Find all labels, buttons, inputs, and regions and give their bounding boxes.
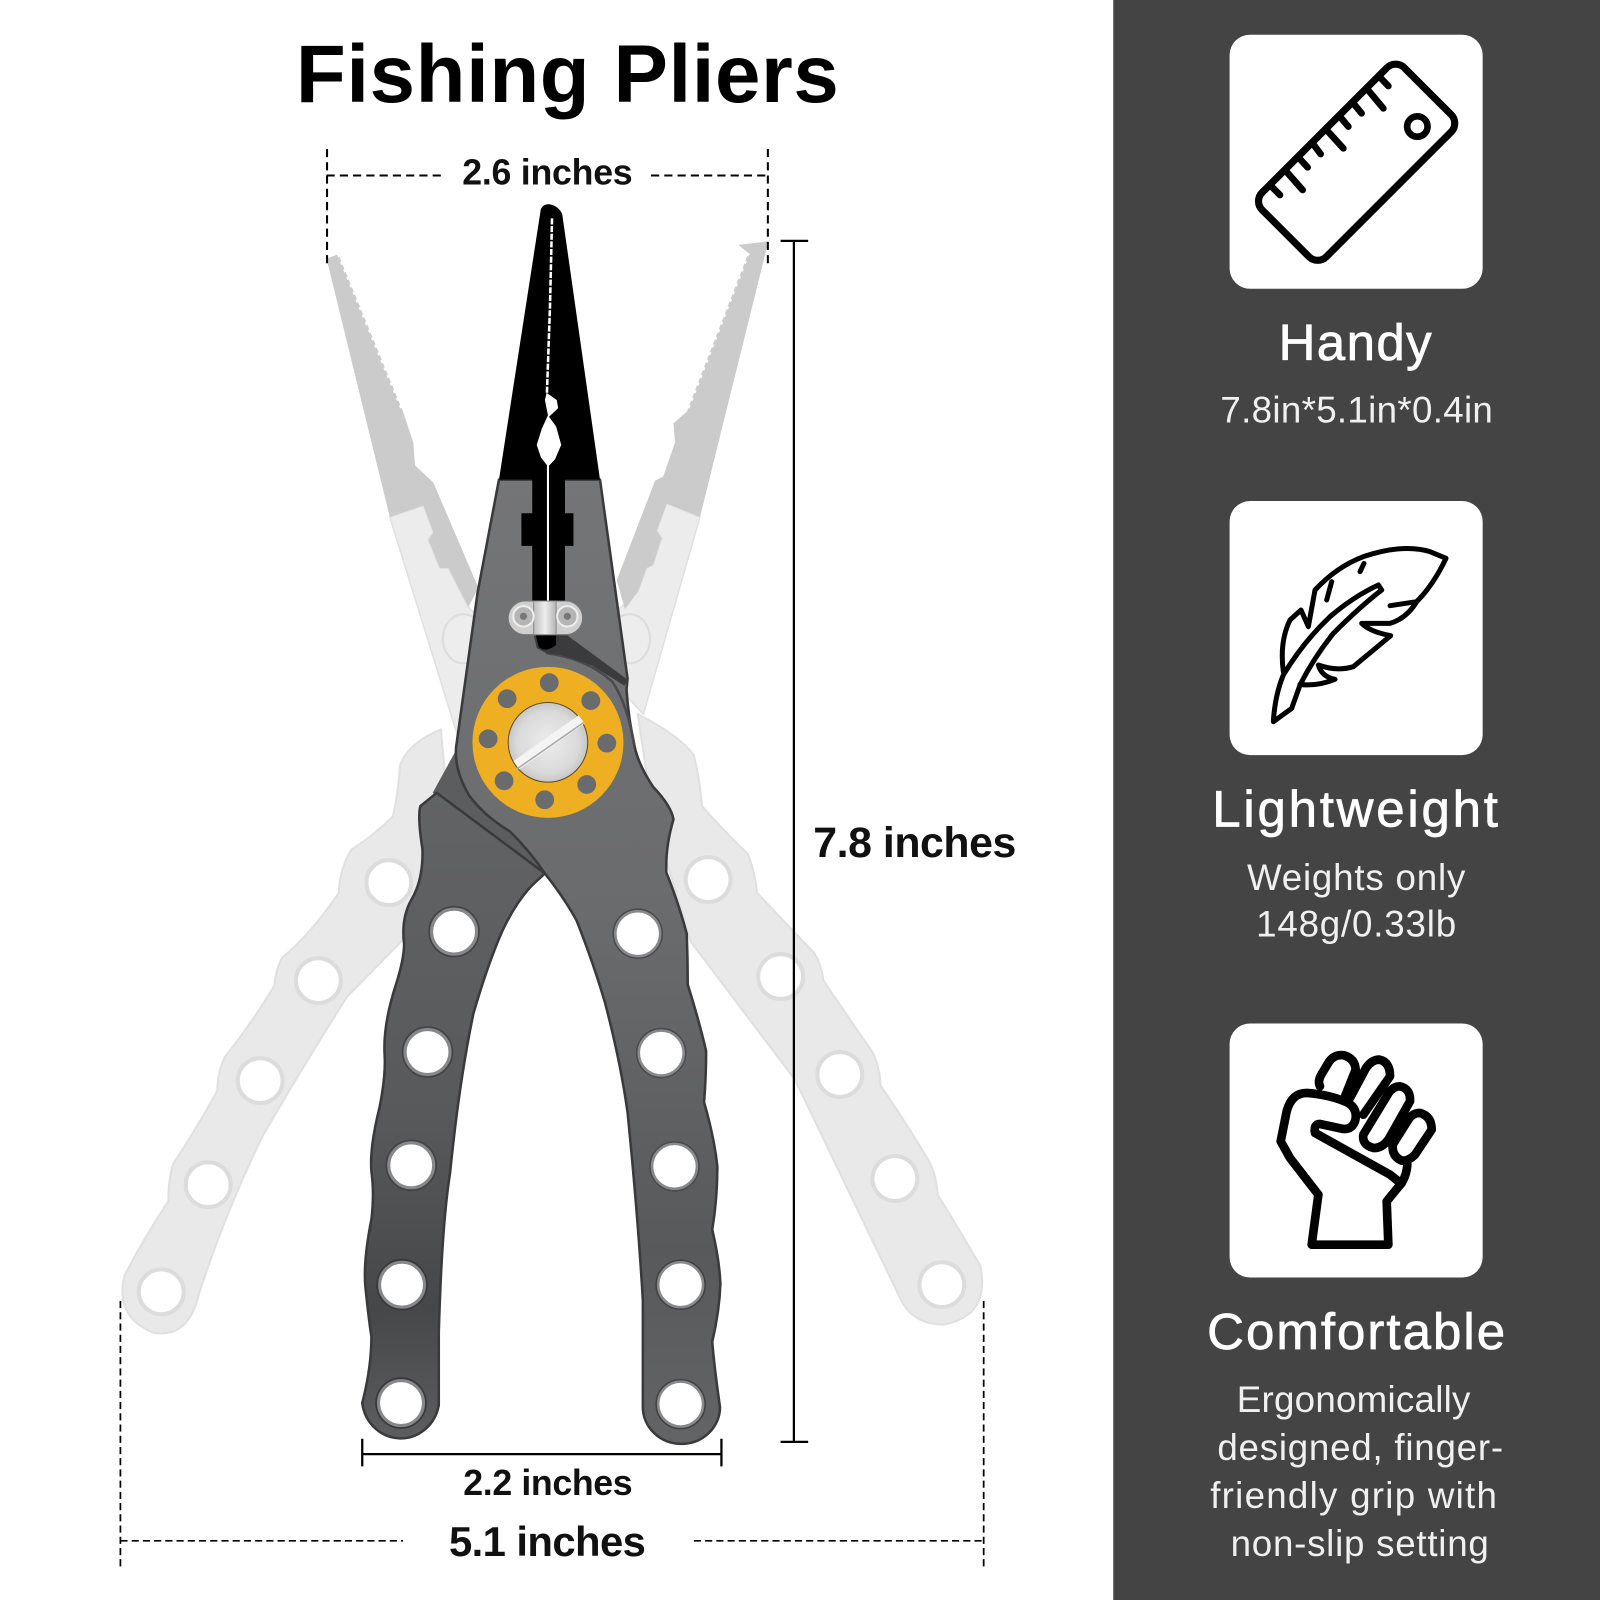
label: 2.2 inches: 2.2 inches — [463, 1463, 633, 1503]
heading: Comfortable: Comfortable — [1207, 1303, 1505, 1360]
spring clip with screws — [508, 601, 583, 635]
dimension: 5.1 inches open span — [120, 1301, 984, 1568]
feature: comfortable — [1207, 1023, 1505, 1564]
feature: handy — [1220, 35, 1493, 430]
text: weight: Weights only — [1247, 857, 1466, 898]
icon card: feather — [1230, 501, 1483, 755]
text: weight value: 148g/0.33lb — [1256, 904, 1456, 945]
text: comfort description: friendly grip with — [1210, 1475, 1497, 1516]
yellow pivot washer — [472, 667, 623, 818]
left handle — [362, 750, 551, 1438]
text: comfort description: non-slip setting — [1231, 1523, 1489, 1564]
title: Fishing Pliers — [296, 29, 839, 120]
label: 5.1 inches: 5.1 inches — [449, 1518, 646, 1565]
main pliers — [362, 204, 720, 1444]
ghost right jaw — [609, 241, 768, 714]
heading: Handy: Handy — [1279, 314, 1432, 371]
text: comfort description: designed, finger- — [1217, 1427, 1503, 1468]
text: dimensions: 7.8in*5.1in*0.4in — [1220, 389, 1493, 430]
pivot screw — [508, 703, 588, 782]
dimension: 2.6 inches jaw opening — [327, 149, 768, 265]
text: comfort description: Ergonomically — [1237, 1379, 1471, 1420]
ghost right handle — [638, 714, 982, 1324]
dimension: 7.8 inches length — [781, 241, 1016, 1442]
text: comfort description — [1210, 1379, 1503, 1564]
jaw cut and spring slot — [534, 635, 635, 747]
ghost pliers: opened position — [122, 241, 982, 1333]
black jaw tip — [499, 204, 600, 602]
label: 2.6 inches: 2.6 inches — [462, 153, 633, 193]
ghost left handle — [122, 730, 449, 1333]
dimension: 2.2 inches handle span — [362, 1439, 721, 1503]
feature: lightweight — [1212, 501, 1498, 945]
right handle and head — [456, 480, 720, 1444]
panel: dark feature sidebar — [1113, 0, 1600, 1600]
icon card: ruler — [1230, 35, 1483, 289]
icon card: fist — [1230, 1023, 1483, 1278]
heading: Lightweight: Lightweight — [1212, 781, 1498, 838]
label: 7.8 inches: 7.8 inches — [813, 819, 1016, 867]
ghost left jaw — [327, 254, 485, 755]
